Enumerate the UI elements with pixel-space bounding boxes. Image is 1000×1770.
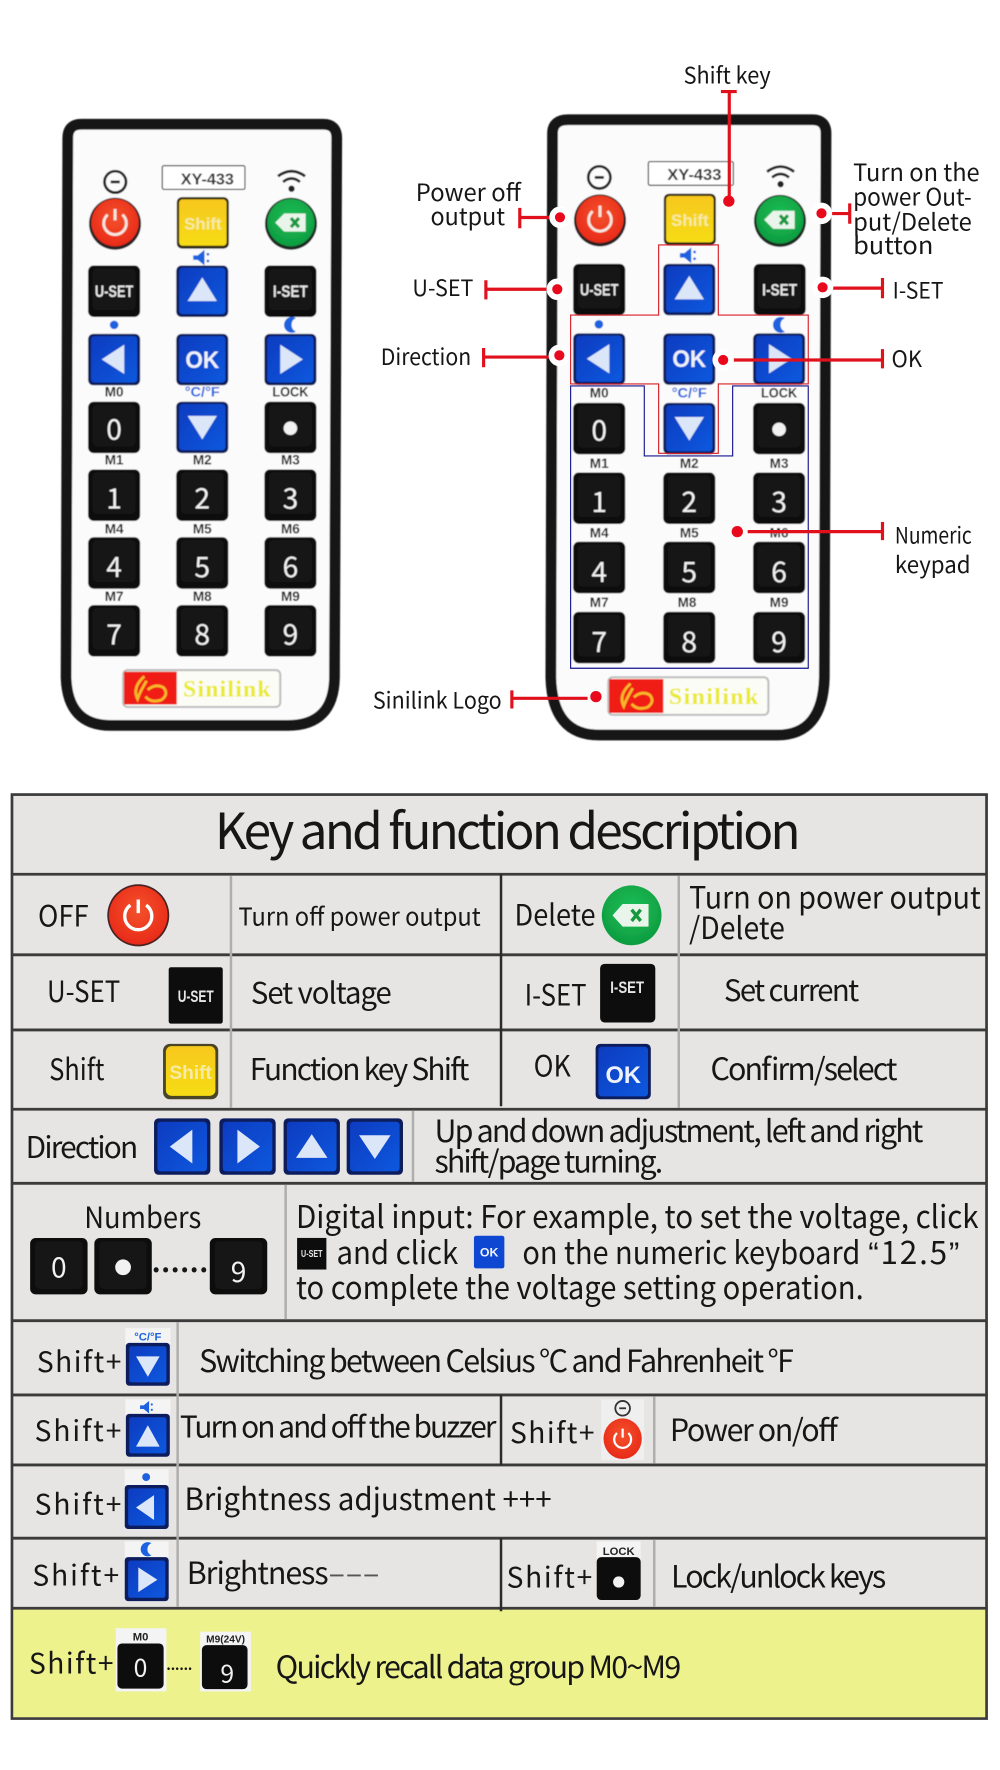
icon: down key with unit label: [125, 1328, 170, 1386]
callout: turn on output and delete: [814, 153, 980, 261]
callout: Sinilink logo: [373, 682, 602, 715]
icon: U-SET key: U-SET: [178, 987, 214, 1006]
icon: key 0 with M0 label: M0: [133, 1632, 148, 1644]
key: 7: 7: [591, 620, 607, 661]
icon: key 9 with M9 label: 9: [220, 1654, 234, 1690]
labels: M7 to M9: M9: [770, 595, 789, 610]
icon: OK key: OK: [605, 1063, 641, 1089]
label: Celsius Fahrenheit: °C/°F: [672, 386, 707, 401]
icon: mini U-SET key: [297, 1238, 326, 1270]
row: switching temperature unit: Switching between Celsius °C and Fahrenheit °F: [199, 1337, 794, 1381]
icon: numeric keys: 9: [231, 1250, 246, 1291]
row: direction: Up and down adjustment, left and right: [435, 1107, 924, 1151]
labels: M1 to M3: M3: [281, 452, 300, 467]
key: delete: [754, 195, 806, 247]
callout: direction: Direction: [381, 339, 471, 372]
labels: M4 to M6: M5: [680, 525, 699, 540]
key: I-SET: I-SET: [762, 280, 798, 299]
key: 1: [573, 473, 625, 524]
key: 3: [264, 469, 316, 521]
icon: mini OK key: OK: [480, 1246, 498, 1260]
dashes: –––: [329, 1549, 379, 1593]
labels: M1 to M3: M2: [193, 452, 212, 467]
row: recall data group: [29, 1628, 681, 1691]
row: recall data group: Shift+: [29, 1641, 113, 1682]
labels: M7 to M9: M8: [193, 589, 212, 604]
key: 2: [663, 473, 715, 524]
key: 1: 1: [106, 476, 122, 517]
icon: power key with minus circle: [601, 1399, 644, 1460]
icon: key 0 with M0 label: 0: [134, 1649, 147, 1685]
row: power on and off: Shift+: [510, 1411, 594, 1452]
outline: direction keys: [571, 245, 808, 453]
labels: M7 to M9: [590, 595, 789, 610]
labels: M4 to M6: M6: [281, 521, 300, 536]
row: buzzer: Turn on and off the buzzer: [180, 1403, 497, 1447]
row: numbers: Numbers: [84, 1195, 201, 1237]
key: 0: 0: [591, 409, 607, 450]
key: 7: 7: [106, 613, 122, 654]
labels: M4 to M6: M6: [770, 525, 789, 540]
icon: wifi: [278, 171, 305, 191]
row: OFF: [38, 884, 481, 946]
callout: U-SET: [412, 270, 565, 303]
key: I-SET: [754, 264, 806, 315]
callout: I-SET: I-SET: [893, 272, 944, 305]
model label: XY-433: [667, 167, 722, 184]
icon: key 9 with M9 label: [200, 1632, 251, 1691]
callout: shift key: [684, 58, 771, 207]
callout: I-SET: [815, 272, 944, 305]
key: shift: [664, 194, 716, 245]
labels: M1 to M3: M2: [680, 456, 699, 471]
labels: M7 to M9: M7: [590, 595, 609, 610]
key: OK: [176, 334, 228, 385]
icon: green delete key: [602, 885, 662, 945]
row: recall data group: Quickly recall data group M0~M9: [276, 1643, 681, 1687]
icon: red power key: [107, 884, 169, 946]
row: OK: OK: [534, 1044, 571, 1086]
key: power: [89, 198, 141, 250]
row: U-SET: U-SET: [47, 969, 120, 1011]
key: 1: 1: [591, 480, 607, 521]
table content: [26, 792, 981, 1691]
row: I-SET: Set current: [724, 968, 859, 1010]
key: U-SET: U-SET: [95, 282, 134, 301]
key: 6: 6: [283, 545, 298, 586]
logo: Sinilink: [123, 670, 280, 707]
key: 3: 3: [771, 480, 787, 521]
row: OK: [534, 1044, 898, 1099]
row: lock keys: [507, 1541, 886, 1600]
icon: right key with moon: [125, 1541, 169, 1601]
key: down: [176, 402, 228, 453]
labels: M4 to M6: M4: [590, 525, 609, 540]
key: shift: [177, 197, 229, 249]
key: 6: 6: [771, 550, 787, 591]
callout: turn on output and delete: Turn on the: [853, 153, 980, 188]
key: 4: 4: [106, 545, 122, 586]
key: 7: [573, 612, 625, 663]
callout: numeric keypad: [732, 518, 972, 580]
row: delete: [515, 874, 981, 948]
outline: numeric keypad: [571, 386, 808, 668]
label: M0: M0: [590, 386, 609, 401]
key: 1: [88, 469, 140, 521]
model label: [162, 166, 245, 189]
icon: OK key: [596, 1044, 651, 1099]
callout: U-SET: U-SET: [412, 270, 473, 303]
icon: mini OK key: [474, 1236, 504, 1268]
key: 8: 8: [681, 620, 697, 661]
key: 9: 9: [283, 613, 298, 654]
key: OK: [663, 333, 715, 385]
key: 6: [753, 542, 805, 593]
callout: power off output: [416, 173, 568, 232]
key: OK: OK: [672, 347, 706, 373]
key: delete: [265, 198, 317, 250]
row: U-SET: Set voltage: [251, 970, 392, 1012]
row: buzzer: Shift+: [35, 1409, 121, 1450]
icon: moon: [773, 317, 785, 333]
row: brightness down: Shift+: [32, 1553, 119, 1594]
key: OK: OK: [185, 348, 219, 374]
key: 3: [753, 473, 805, 524]
key: 0: [573, 403, 625, 454]
row: lock keys: Shift+: [507, 1556, 592, 1597]
row: brightness down: Brightness: [187, 1549, 329, 1593]
key: 4: 4: [591, 550, 607, 591]
panel: plain remote control: [66, 124, 337, 725]
icon: brightness dot: [110, 321, 118, 329]
labels: M4 to M6: M4: [105, 521, 124, 536]
row: delete: Delete: [515, 892, 596, 934]
labels: M7 to M9: M9: [281, 589, 300, 604]
row: direction: Direction: [26, 1123, 138, 1167]
row: brightness up: Shift+: [35, 1482, 121, 1523]
key: left: [88, 334, 140, 385]
row: OFF: Turn off power output: [239, 897, 481, 933]
row: direction: shift/page turning.: [435, 1137, 663, 1182]
logo: Sinilink: Sinilink: [183, 677, 271, 703]
row: OFF: OFF: [38, 894, 89, 936]
callout: power off output: output: [431, 197, 505, 232]
row: switching temperature unit: Shift+: [37, 1340, 121, 1381]
key: down: [663, 403, 715, 454]
callout: power off output: Power off: [416, 173, 522, 208]
row: brightness up: [35, 1469, 552, 1529]
key: power: [574, 194, 626, 246]
icon: minus circle: [105, 171, 126, 193]
label: LOCK: LOCK: [272, 385, 309, 400]
key: 9: [753, 612, 805, 663]
row: delete: /Delete: [689, 904, 785, 948]
label: LOCK: LOCK: [761, 386, 797, 401]
key: dot: [264, 402, 316, 453]
model label: XY-433: [181, 172, 234, 189]
key: right: [264, 334, 316, 385]
key: 0: 0: [106, 408, 122, 449]
labels: M1 to M3: M1: [590, 456, 609, 471]
key: 8: 8: [194, 613, 210, 654]
key: 5: 5: [194, 545, 210, 586]
icon: brightness dot: [595, 320, 603, 329]
yellow row background: [13, 1608, 985, 1717]
callout: Sinilink logo: Sinilink Logo: [373, 682, 502, 715]
row: buzzer: [35, 1399, 497, 1457]
icon: minus circle: [588, 166, 610, 188]
row: power on and off: Power on/off: [670, 1406, 839, 1450]
key: 2: 2: [194, 476, 210, 517]
row: delete: Turn on power output: [689, 874, 981, 918]
icon: numeric keys: ......: [152, 1241, 208, 1280]
key: 3: 3: [283, 476, 298, 517]
row: numbers: and click: [337, 1228, 459, 1274]
key: 7: [88, 605, 140, 656]
key: I-SET: [264, 266, 316, 317]
key: 5: [663, 542, 715, 593]
icon: speaker: [680, 247, 696, 263]
icon: speaker: [193, 250, 209, 266]
callout: turn on output and delete: button: [853, 226, 933, 261]
key: up: [176, 266, 228, 317]
callout: numeric keypad: keypad: [895, 547, 971, 580]
callout: numeric keypad: Numeric: [895, 518, 972, 551]
callout: OK: OK: [892, 341, 922, 374]
key: 8: [663, 612, 715, 663]
icon: I-SET key: [600, 964, 655, 1022]
icon: wifi: [767, 167, 794, 186]
key: 2: [176, 469, 228, 521]
key: 5: 5: [681, 550, 697, 591]
panel: key and function table: [11, 792, 988, 1719]
icon: left key with dot: [125, 1469, 169, 1529]
labels: M1 to M3: M1: [105, 452, 124, 467]
row: shift: Function key Shift: [250, 1045, 469, 1089]
panel: annotated remote control: [551, 120, 826, 735]
key: 5: [176, 537, 228, 589]
row: numbers: [30, 1192, 979, 1309]
key: 4: [573, 542, 625, 593]
icon: I-SET key: I-SET: [610, 978, 645, 997]
labels: M7 to M9: M8: [678, 595, 697, 610]
key: U-SET: U-SET: [580, 280, 619, 299]
icon: shift key: Shift: [169, 1063, 213, 1084]
icon: dot key with lock label: LOCK: [603, 1546, 636, 1558]
table background: [12, 795, 987, 1719]
labels: M1 to M3: [105, 452, 300, 467]
labels: M4 to M6: [105, 521, 300, 536]
callout: turn on output and delete: put/Delete: [853, 203, 972, 238]
icon: direction keys: [154, 1118, 403, 1175]
key: 6: [264, 537, 316, 589]
row: U-SET: [47, 967, 392, 1024]
row: shift: [49, 1044, 469, 1099]
icon: moon: [284, 317, 296, 333]
icon: numeric keys: 0: [51, 1245, 67, 1286]
row: numbers: to complete the voltage setting operation.: [296, 1263, 864, 1309]
title: Key and function description: [215, 792, 801, 864]
key: U-SET: [88, 266, 140, 317]
key: 9: [264, 605, 316, 656]
key: shift: Shift: [184, 214, 222, 233]
row: I-SET: [525, 964, 859, 1022]
label: M0: M0: [105, 385, 124, 400]
callout: shift key: Shift key: [684, 58, 771, 91]
key: 0: [88, 402, 140, 453]
callout: OK: [715, 341, 922, 374]
model label: [648, 162, 733, 185]
key: left: [573, 333, 625, 385]
row: I-SET: I-SET: [525, 973, 587, 1015]
icon: dot key with lock label: [597, 1541, 641, 1600]
label: Celsius Fahrenheit: °C/°F: [185, 385, 220, 400]
labels: M4 to M6: M5: [193, 521, 212, 536]
labels: M1 to M3: [590, 456, 789, 471]
row: direction: [26, 1107, 924, 1182]
key: dot: [753, 403, 805, 454]
labels: M7 to M9: M7: [105, 589, 124, 604]
key: right: [753, 333, 805, 385]
icon: key 9 with M9 label: M9(24V): [206, 1634, 245, 1645]
row: power on and off: [510, 1399, 839, 1460]
logo: Sinilink: Sinilink: [669, 684, 759, 710]
callout: turn on output and delete: power Out-: [853, 178, 972, 213]
row: brightness up: Brightness adjustment +++: [184, 1475, 552, 1519]
row: OK: Confirm/select: [711, 1045, 898, 1089]
labels: M4 to M6: [590, 525, 789, 540]
row: lock keys: Lock/unlock keys: [671, 1553, 886, 1597]
key: shift: Shift: [671, 211, 709, 230]
key: U-SET: [573, 264, 625, 315]
logo: Sinilink: [608, 677, 768, 715]
labels: M1 to M3: M3: [770, 456, 789, 471]
callout: direction: [381, 339, 567, 372]
key: I-SET: I-SET: [273, 282, 308, 301]
row: brightness down: [32, 1541, 379, 1601]
key: 4: [88, 537, 140, 589]
dots: ......: [166, 1654, 192, 1674]
key: 8: [176, 605, 228, 656]
key: 2: 2: [681, 480, 697, 521]
remote body: [551, 120, 826, 735]
key: 9: 9: [771, 620, 787, 661]
table grid: [11, 874, 988, 1611]
icon: down key with unit label: °C/°F: [134, 1332, 162, 1344]
row: shift: Shift: [49, 1047, 104, 1089]
icon: mini U-SET key: U-SET: [301, 1249, 323, 1260]
icon: shift key: [163, 1044, 218, 1099]
row: switching temperature unit: [37, 1328, 794, 1386]
labels: M7 to M9: [105, 589, 300, 604]
icon: numeric keys: [30, 1238, 267, 1294]
icon: key 0 with M0 label: [116, 1628, 166, 1691]
callouts: [373, 58, 980, 715]
icon: U-SET key: [169, 967, 223, 1024]
remote body: [66, 124, 337, 725]
row: numbers: “12.5”: [868, 1228, 959, 1274]
row: numbers: on the numeric keyboard: [522, 1228, 860, 1274]
key: up: [663, 264, 715, 315]
icon: up key with speaker: [125, 1399, 170, 1457]
